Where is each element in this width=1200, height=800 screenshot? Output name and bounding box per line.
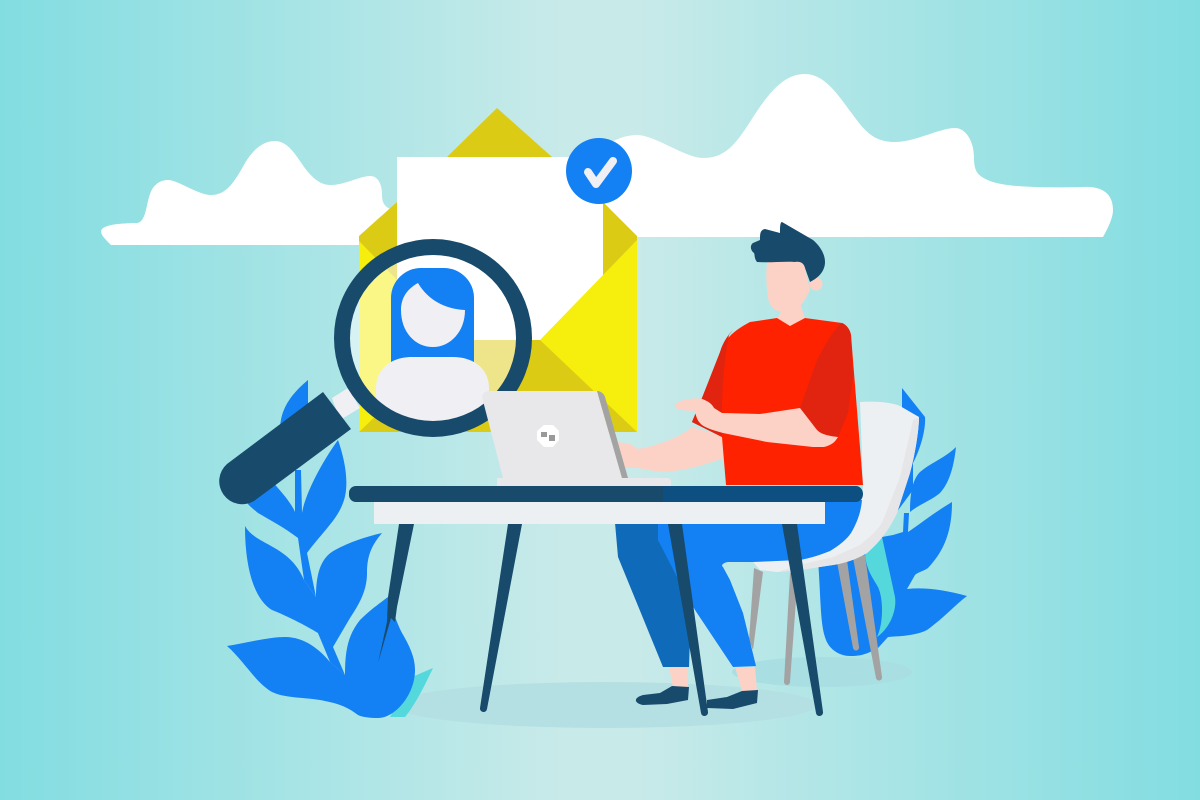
left sleeve shade <box>692 330 733 437</box>
leaves <box>227 380 415 718</box>
magnifier <box>219 247 524 504</box>
ankles <box>669 667 757 691</box>
person upper body <box>618 222 863 485</box>
ear <box>810 278 822 290</box>
desk top <box>349 486 863 502</box>
person lower body <box>613 500 865 709</box>
right sleeve shade <box>800 323 853 438</box>
laptop <box>482 391 671 486</box>
plant: left <box>227 380 433 718</box>
laptop base <box>497 478 671 486</box>
envelope back <box>359 202 637 345</box>
check badge <box>566 138 632 204</box>
profile avatar <box>376 268 489 421</box>
laptop screen <box>482 391 622 478</box>
stem accent <box>865 537 895 637</box>
leaf accent <box>390 668 433 717</box>
ground shadows <box>393 657 912 728</box>
envelope back flap <box>447 108 552 157</box>
leaves <box>818 388 967 656</box>
far arm <box>618 427 724 472</box>
cloud: left <box>101 141 400 245</box>
envelope front left <box>359 241 456 432</box>
desk legs <box>378 524 823 716</box>
letter <box>397 157 603 347</box>
desk underside <box>374 502 825 524</box>
neck <box>775 303 806 328</box>
envelope front bottom <box>359 340 637 432</box>
handle <box>219 392 351 504</box>
shirt <box>692 318 863 485</box>
laptop edge <box>597 391 628 478</box>
chair seat <box>753 402 919 572</box>
laptop logo <box>537 425 559 447</box>
near arm and hand <box>675 398 838 447</box>
ring <box>342 247 524 429</box>
hair <box>751 222 825 282</box>
chair legs <box>749 555 882 685</box>
envelope front right <box>540 240 637 432</box>
face <box>766 260 810 311</box>
front leg <box>658 500 865 667</box>
cloud: right <box>600 74 1113 237</box>
envelope <box>359 108 637 432</box>
back leg <box>613 500 690 667</box>
neck <box>332 388 360 420</box>
lens <box>348 253 518 423</box>
desk <box>349 486 863 716</box>
shoes <box>636 686 689 705</box>
plant: right <box>818 388 967 656</box>
